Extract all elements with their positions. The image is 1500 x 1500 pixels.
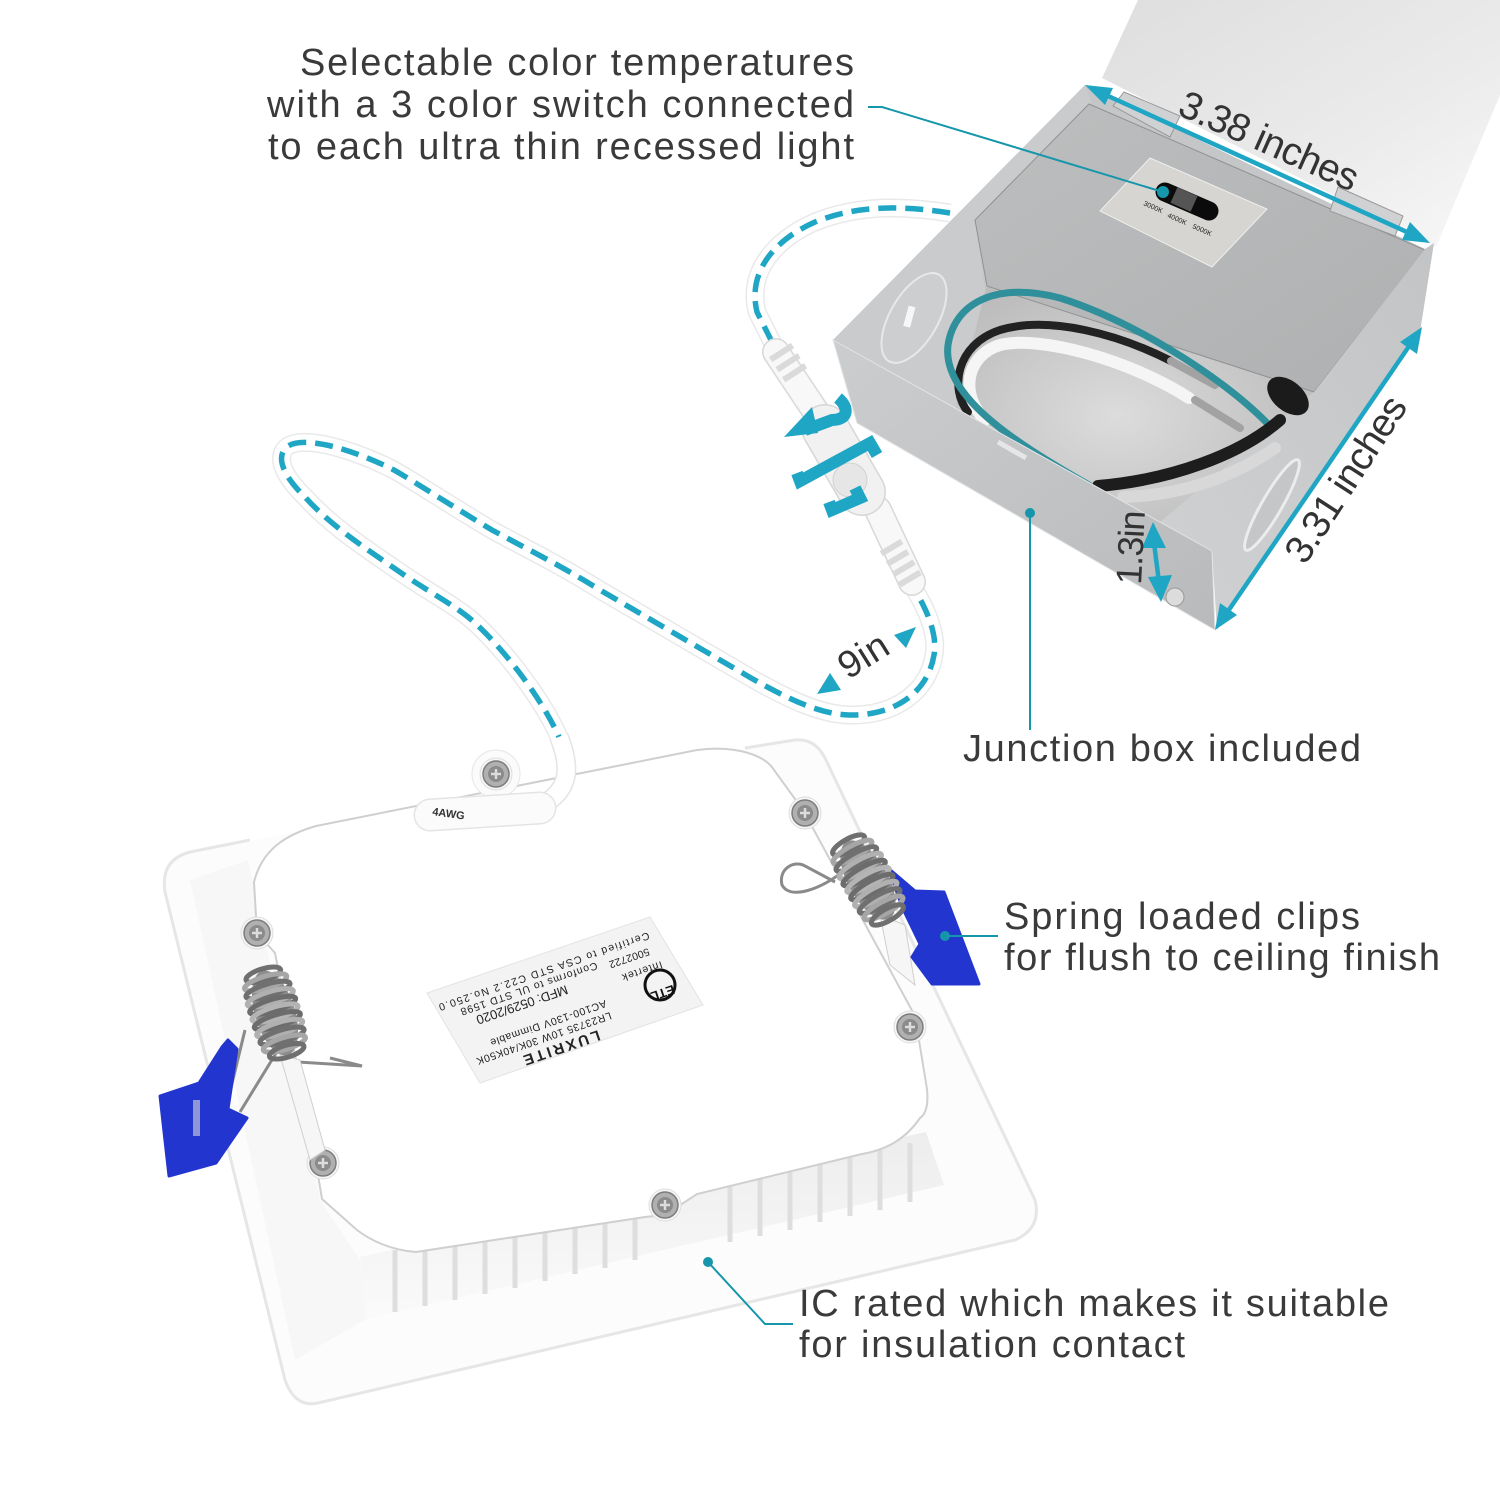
heat sink fins xyxy=(360,1132,944,1319)
3.38 inches dimension xyxy=(1085,83,1430,243)
label text: LUXRITE xyxy=(521,1026,602,1068)
spring clip wire right xyxy=(781,864,915,985)
box lid xyxy=(1102,0,1500,247)
switch labels: 4000K xyxy=(1166,212,1188,227)
trim frame edge xyxy=(164,740,1036,1404)
label text: 5002722 xyxy=(607,945,651,970)
black wire upper xyxy=(958,325,1171,412)
1.3in dimension: 1.3in xyxy=(1108,509,1153,585)
ETL mark xyxy=(645,970,677,1004)
callout: IC rated: IC rated which makes it suitable xyxy=(799,1283,1389,1325)
wires xyxy=(948,292,1316,497)
cable xyxy=(282,208,950,800)
callout: spring clips: for flush to ceiling finish xyxy=(1004,937,1440,979)
label text: MFD: 0529/2020 xyxy=(474,982,570,1028)
main housing xyxy=(254,749,927,1252)
3.31 inches dimension: 3.31 inches xyxy=(1276,388,1416,571)
label text xyxy=(437,929,664,1068)
outer trim frame xyxy=(164,740,1036,1404)
twist arrows xyxy=(784,398,877,510)
3.38 inches dimension: 3.38 inches xyxy=(1172,83,1365,200)
9in label: 9in xyxy=(831,624,897,688)
grey wire xyxy=(1123,448,1275,497)
rubber grommet xyxy=(1260,369,1316,423)
box front face xyxy=(833,340,1215,630)
9in dimension xyxy=(817,624,916,694)
callout: IC rated xyxy=(703,1257,1389,1366)
right knockout disc xyxy=(1237,455,1307,555)
teal dashes xyxy=(282,208,950,737)
spring left xyxy=(239,962,311,1064)
box left inner wall xyxy=(833,85,1092,410)
callout: IC rated: for insulation contact xyxy=(799,1324,1185,1366)
box right wall xyxy=(1160,243,1434,630)
switch labels: 3000K xyxy=(1142,200,1164,215)
box floor xyxy=(955,286,1314,522)
teal wire xyxy=(948,292,1267,485)
screws xyxy=(241,797,926,1221)
label text: AC100-130V Dimmable xyxy=(489,997,608,1048)
label text: Certified to CSA STD C22.2 No.250.0 xyxy=(437,929,651,1013)
box interior base xyxy=(833,85,1425,551)
junction box xyxy=(833,0,1500,630)
arrowheads xyxy=(894,627,916,648)
callout: spring clips xyxy=(940,896,1440,979)
label text: LR23735 10W 30K/40K50K xyxy=(475,1009,613,1067)
switch labels: 5000K xyxy=(1191,223,1213,238)
blue clip left xyxy=(160,1040,247,1176)
callout: junction box: Junction box included xyxy=(963,728,1361,770)
switch slot xyxy=(1165,192,1209,211)
lower cable strain relief xyxy=(430,737,566,822)
spring clip wire left xyxy=(228,1030,362,1160)
wire gauge marking: 4AWG xyxy=(432,806,465,822)
callout: junction box xyxy=(963,508,1361,770)
hinge tabs xyxy=(1113,92,1403,236)
label text: Intertek xyxy=(620,958,664,983)
black cable lower xyxy=(1098,420,1280,486)
switch labels xyxy=(1142,200,1213,238)
cable white body xyxy=(282,208,950,800)
callout: colour temperature: Selectable color temperatures xyxy=(300,42,854,84)
waterproof connector xyxy=(776,350,912,582)
product label xyxy=(427,917,703,1083)
callout: spring clips: Spring loaded clips xyxy=(1004,896,1360,938)
rivet xyxy=(1166,588,1184,606)
blue clip right xyxy=(888,868,979,984)
recessed light panel xyxy=(160,740,1036,1404)
ETL mark: ETL xyxy=(649,982,677,1004)
callout: colour temperature xyxy=(266,42,854,168)
switch slider xyxy=(1174,195,1194,204)
left trim shading xyxy=(190,860,366,1360)
3.31 inches dimension xyxy=(1215,327,1422,630)
cable outline xyxy=(282,208,950,800)
label text: Conforms to UL STD 1598 xyxy=(459,959,599,1017)
callout: colour temperature: with a 3 color switch connected xyxy=(266,84,854,126)
colour switch plate xyxy=(1100,158,1267,267)
braided ends xyxy=(1171,361,1240,428)
box back plate xyxy=(975,104,1425,392)
knockout disc xyxy=(868,263,960,373)
white wire xyxy=(969,343,1189,420)
spring right xyxy=(825,828,911,932)
1.3in dimension xyxy=(1108,509,1172,602)
callout: colour temperature: to each ultra thin recessed light xyxy=(268,126,854,168)
front knockout slot xyxy=(998,442,1026,458)
callout line: colour switch xyxy=(868,107,1169,198)
